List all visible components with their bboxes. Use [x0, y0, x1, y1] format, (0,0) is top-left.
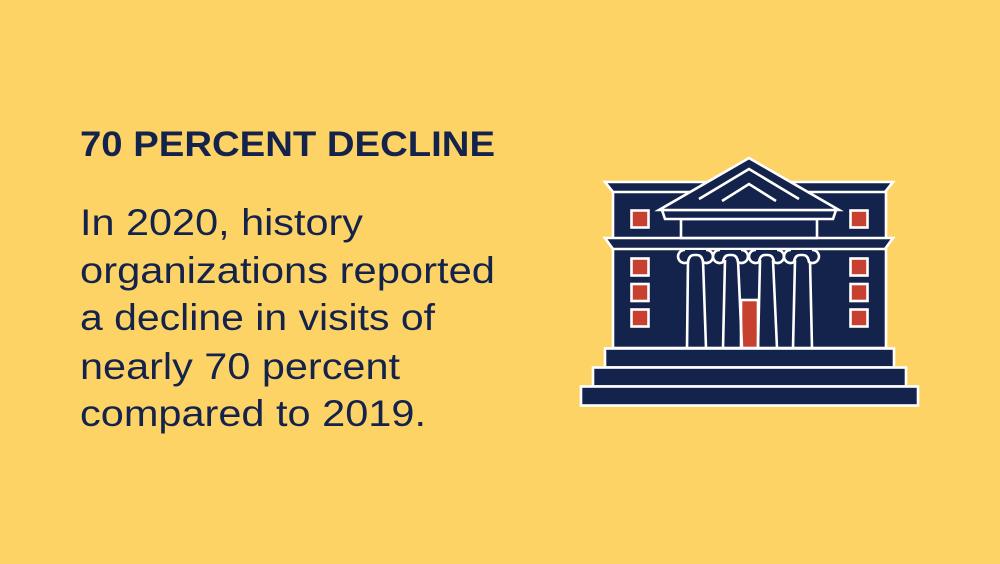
- body text: [80, 202, 495, 434]
- column capitals: [678, 250, 819, 263]
- pediment block: [681, 219, 817, 238]
- body text: nearly 70 percent: [80, 346, 401, 387]
- middle cornice: [605, 238, 893, 249]
- pediment base: [662, 210, 836, 219]
- icon: museum building: [581, 158, 918, 406]
- heading: 70 PERCENT DECLINE: [80, 125, 495, 164]
- body text: a decline in visits of: [80, 297, 436, 338]
- body text: compared to 2019.: [80, 393, 426, 434]
- red door: [741, 300, 758, 348]
- columns: [687, 260, 812, 348]
- pediment inner lines: [699, 169, 799, 201]
- pediment roof: [659, 158, 839, 210]
- lower wall: [613, 248, 886, 348]
- right windows: [850, 210, 868, 326]
- upper cornice: [605, 182, 893, 192]
- body text: In 2020, history: [80, 202, 364, 243]
- body text: organizations reported: [80, 250, 495, 291]
- left windows: [632, 210, 648, 326]
- steps: [581, 348, 918, 406]
- upper wall: [613, 191, 886, 239]
